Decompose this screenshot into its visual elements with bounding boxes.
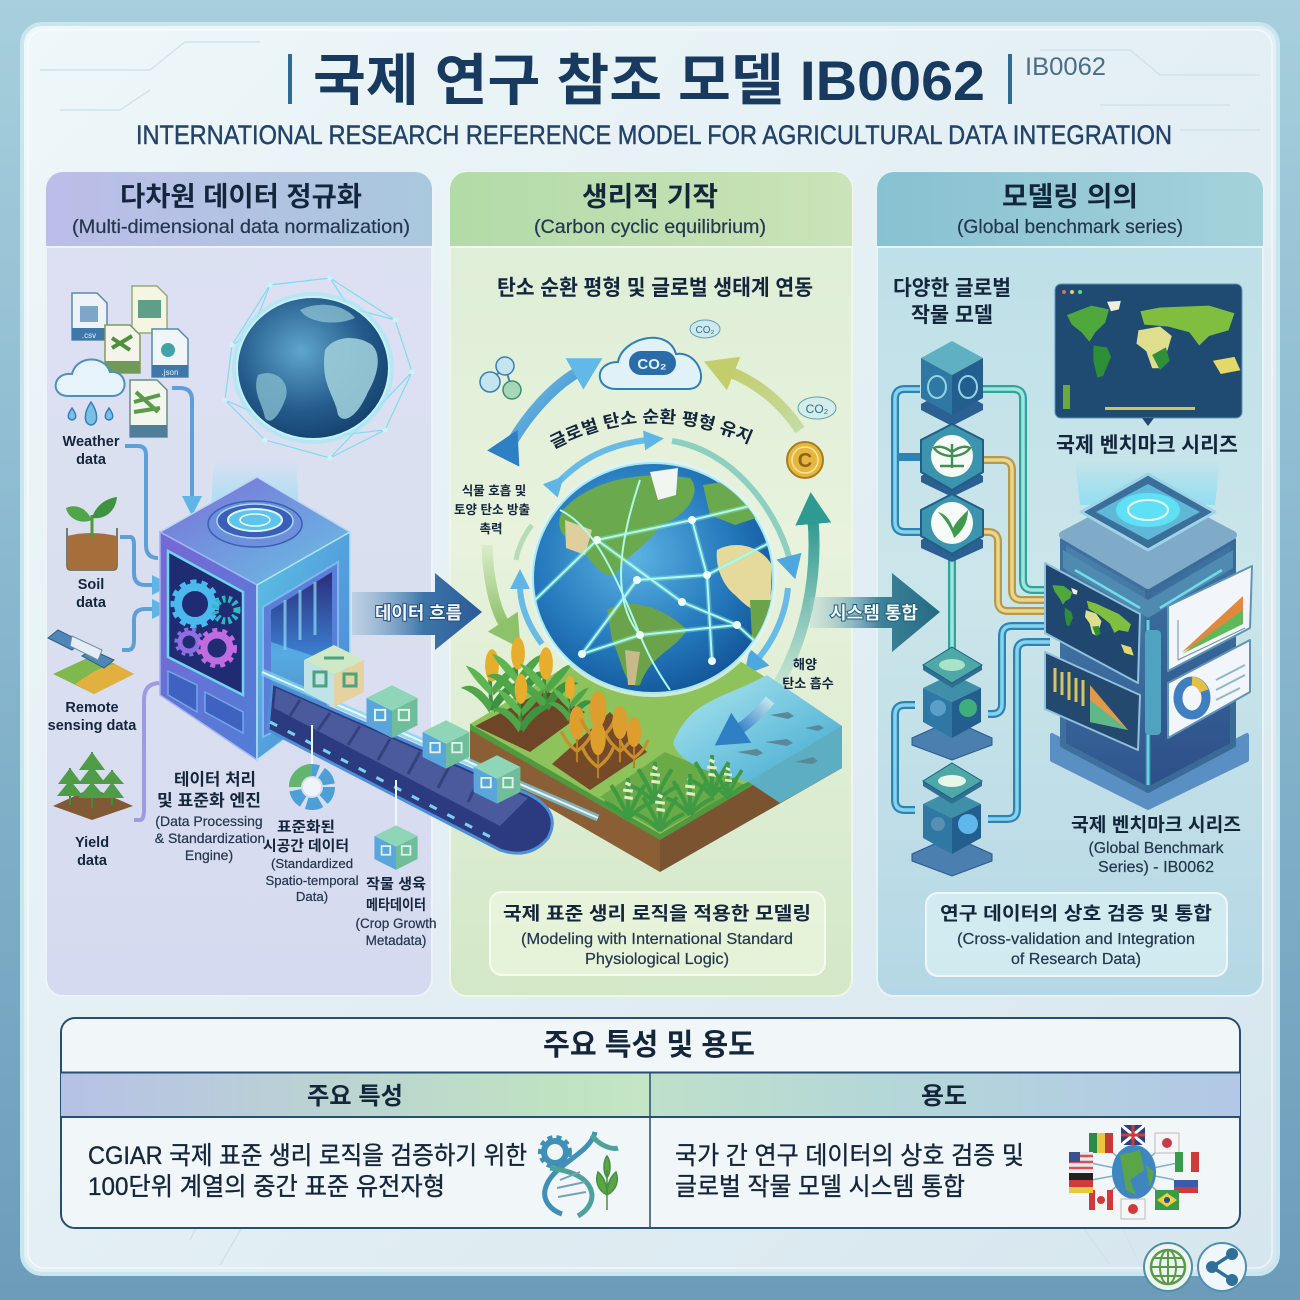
- arrow: carbon to atmosphere: [730, 372, 800, 430]
- arrows: data sources to engine: [120, 388, 192, 820]
- label: standardized data: Spatio-temporal: [265, 873, 359, 888]
- inner cycle arrows: [516, 440, 790, 711]
- heading: carbon cycle: 탄소 순환 평형 및 글로벌 생태계 연동: [497, 276, 813, 300]
- globe: earth network: [529, 459, 777, 697]
- icon: globe badge: [1144, 1243, 1192, 1291]
- engine control buttons: [168, 671, 243, 733]
- icon: CO2 badge: CO₂: [806, 402, 829, 416]
- label: ocean sink: 탄소 흡수: [782, 676, 834, 691]
- label: soil data: [76, 577, 107, 611]
- panel header: physiological mechanism: (Carbon cyclic equilibrium): [534, 216, 766, 238]
- icon: data files: .csv: [82, 331, 96, 340]
- table header row: 주요 특성: [307, 1083, 403, 1110]
- label: engine: 테이터 처리: [174, 770, 256, 789]
- label: standardized data: 표준화된: [277, 819, 335, 836]
- table: features and uses: [61, 1018, 1240, 1228]
- rice crops: [604, 755, 748, 831]
- server screen: line chart: [1168, 566, 1252, 671]
- data cubes on conveyor: [304, 645, 520, 804]
- label: global benchmark series: Series) - IB0062: [1098, 859, 1214, 876]
- icon: CO2 cloud: CO₂: [696, 325, 715, 336]
- label: benchmark series top: 국제 벤치마크 시리즈: [1056, 434, 1238, 457]
- label: soil data: data: [76, 595, 107, 611]
- panel header: data normalization: [46, 172, 432, 248]
- label: standardized data: Data): [296, 889, 328, 904]
- label: crop metadata: [355, 876, 437, 948]
- use description: 글로벌 작물 모델 시스템 통합: [675, 1173, 965, 1201]
- engine screen with gears: [168, 551, 243, 695]
- arrow: system integration: [810, 573, 940, 652]
- label: yield data: [75, 835, 109, 869]
- panel header: modeling significance: [877, 172, 1263, 248]
- chart: world map panel: [1055, 284, 1242, 426]
- callout: modeling: Physiological Logic): [585, 951, 729, 968]
- crop model node 5: [912, 763, 992, 876]
- label: crop metadata: 메타데이터: [366, 897, 426, 914]
- callout: cross validation: [926, 893, 1227, 976]
- panel: physiological mechanism: [449, 171, 853, 997]
- label: yield data: Yield: [75, 835, 109, 851]
- label: engine: & Standardization: [155, 830, 265, 846]
- label: remote sensing data: sensing data: [48, 718, 137, 734]
- label: engine: (Data Processing: [155, 813, 263, 829]
- pipes between models and server: [895, 389, 1050, 819]
- feature description: [88, 1142, 527, 1201]
- label: respiration: [454, 484, 530, 536]
- engine output door: [263, 562, 338, 737]
- label: engine: [155, 770, 265, 863]
- processing engine: [160, 477, 350, 760]
- panel header: data normalization: 다차원 데이터 정규화: [120, 182, 362, 212]
- callout: cross validation: 연구 데이터의 상호 검증 및 통합: [940, 903, 1212, 924]
- engine top ring: [208, 501, 302, 547]
- icon: data files: [72, 286, 188, 437]
- callout: modeling: (Modeling with International Standard: [521, 931, 793, 948]
- label: respiration: 토양 탄소 방출: [454, 503, 530, 517]
- crop model node 1: [921, 341, 983, 426]
- panel header: physiological mechanism: 생리적 기작: [582, 182, 718, 212]
- icon: yield crops: [53, 752, 133, 820]
- label: standardized data: 시공간 데이터: [263, 838, 349, 855]
- arrow: atmosphere exchange: [505, 372, 578, 455]
- icon: CO2 cloud: CO₂: [637, 356, 667, 373]
- panel header: data normalization: (Multi-dimensional data normalization): [72, 216, 410, 238]
- panel: data normalization: [46, 172, 437, 996]
- label: global benchmark series: 국제 벤치마크 시리즈: [1071, 814, 1241, 836]
- land diorama: [461, 610, 842, 872]
- arrow: ocean sink: [738, 700, 770, 730]
- label: weather data: Weather: [63, 434, 120, 450]
- icon: share badge: [1198, 1243, 1246, 1291]
- arrow: data flow: 데이터 흐름: [375, 603, 462, 623]
- heading: crop models: [893, 277, 1011, 327]
- label: standardized data: (Standardized: [271, 856, 353, 871]
- label: crop metadata: Metadata): [366, 933, 426, 948]
- model code tag: IB0062: [1025, 53, 1106, 81]
- callout: modeling: [490, 892, 825, 975]
- icon: standardized data ring: [295, 725, 329, 804]
- crop model node 3: [921, 494, 983, 562]
- label: global benchmark series: (Global Benchmark: [1088, 840, 1224, 857]
- panel header: physiological mechanism: [450, 172, 852, 248]
- label: global benchmark series: [1071, 814, 1241, 876]
- conveyor belt: [262, 672, 598, 853]
- label: remote sensing data: [48, 700, 137, 734]
- arrow: system integration: 시스템 통합: [830, 603, 918, 623]
- benchmark server: [1045, 474, 1252, 808]
- subtitle: INTERNATIONAL RESEARCH REFERENCE MODEL FOR AGRICULTURAL DATA INTEGRATION: [136, 120, 1172, 150]
- server screen: map: [1045, 563, 1140, 683]
- label: soil data: Soil: [78, 577, 104, 593]
- label: standardized data: [263, 819, 359, 904]
- icon: soil plant: [66, 497, 117, 570]
- label: ocean sink: [782, 657, 834, 691]
- icon: carbon coin: C: [798, 450, 812, 472]
- feature description: CGIAR 국제 표준 생리 로직을 검증하기 위한: [88, 1142, 527, 1170]
- callout: cross validation: of Research Data): [1011, 951, 1141, 968]
- server screen: bar chart: [1045, 652, 1140, 750]
- icon: carbon molecule: [480, 357, 521, 399]
- icon: data files: .json: [162, 368, 178, 377]
- label: respiration: 촉력: [479, 522, 503, 536]
- label: weather data: data: [76, 452, 107, 468]
- table header row: [61, 1072, 1240, 1228]
- label: ocean sink: 해양: [793, 657, 817, 672]
- feature description: 100단위 계열의 중간 표준 유전자형: [88, 1173, 445, 1201]
- server screen: donut chart: [1168, 640, 1250, 738]
- label: engine: Engine): [185, 847, 233, 863]
- icon: carbon coin: [787, 442, 823, 478]
- crop model node 4: [912, 647, 992, 760]
- table header row: 용도: [921, 1083, 967, 1110]
- icon: CO2 badge: [798, 397, 836, 419]
- label: crop metadata: 작물 생육: [366, 876, 426, 893]
- light beam: [1075, 460, 1220, 505]
- icon: digital globe: [222, 276, 414, 460]
- arrow: data flow: [352, 573, 482, 650]
- icon: weather cloud: [56, 359, 125, 425]
- light beam: [210, 458, 300, 525]
- corn crops: [461, 637, 593, 733]
- callout: cross validation: (Cross-validation and Integration: [957, 931, 1195, 948]
- heading: crop models: 다양한 글로벌: [893, 277, 1011, 300]
- use description: 국가 간 연구 데이터의 상호 검증 및: [675, 1142, 1024, 1170]
- title: 국제 연구 참조 모델 IB0062: [313, 49, 985, 112]
- use description: [675, 1142, 1024, 1201]
- icon: DNA gear wheat: [540, 1132, 618, 1216]
- icon: satellite over field: [48, 630, 134, 694]
- icon: CO2 cloud: [600, 320, 720, 389]
- heading: crop models: 작물 모델: [911, 304, 993, 327]
- callout: modeling: 국제 표준 생리 로직을 적용한 모델링: [503, 903, 811, 924]
- wheat crops: [562, 691, 648, 778]
- crop model node 2: [921, 424, 983, 497]
- table title: 주요 특성 및 용도: [543, 1029, 755, 1062]
- label: crop metadata: (Crop Growth: [355, 916, 437, 931]
- ocean: [673, 675, 842, 803]
- panel header: modeling significance: 모델링 의의: [1002, 182, 1138, 212]
- label: remote sensing data: Remote: [65, 700, 119, 716]
- icon: flags around globe: [1069, 1125, 1199, 1219]
- label: yield data: data: [77, 853, 108, 869]
- icon: metadata cube: [374, 780, 418, 870]
- panel: modeling significance: [877, 172, 1263, 996]
- arrow: ocean carbon rising: [775, 520, 814, 690]
- arrow: respiration down: [487, 545, 505, 625]
- label: respiration: 식물 호흡 및: [462, 484, 526, 498]
- panel header: modeling significance: (Global benchmark series): [957, 216, 1183, 238]
- curved label: global carbon balance: 글로벌 탄소 순환 평형 유지: [550, 408, 754, 449]
- label: weather data: [63, 434, 120, 468]
- label: engine: 및 표준화 엔진: [157, 791, 261, 810]
